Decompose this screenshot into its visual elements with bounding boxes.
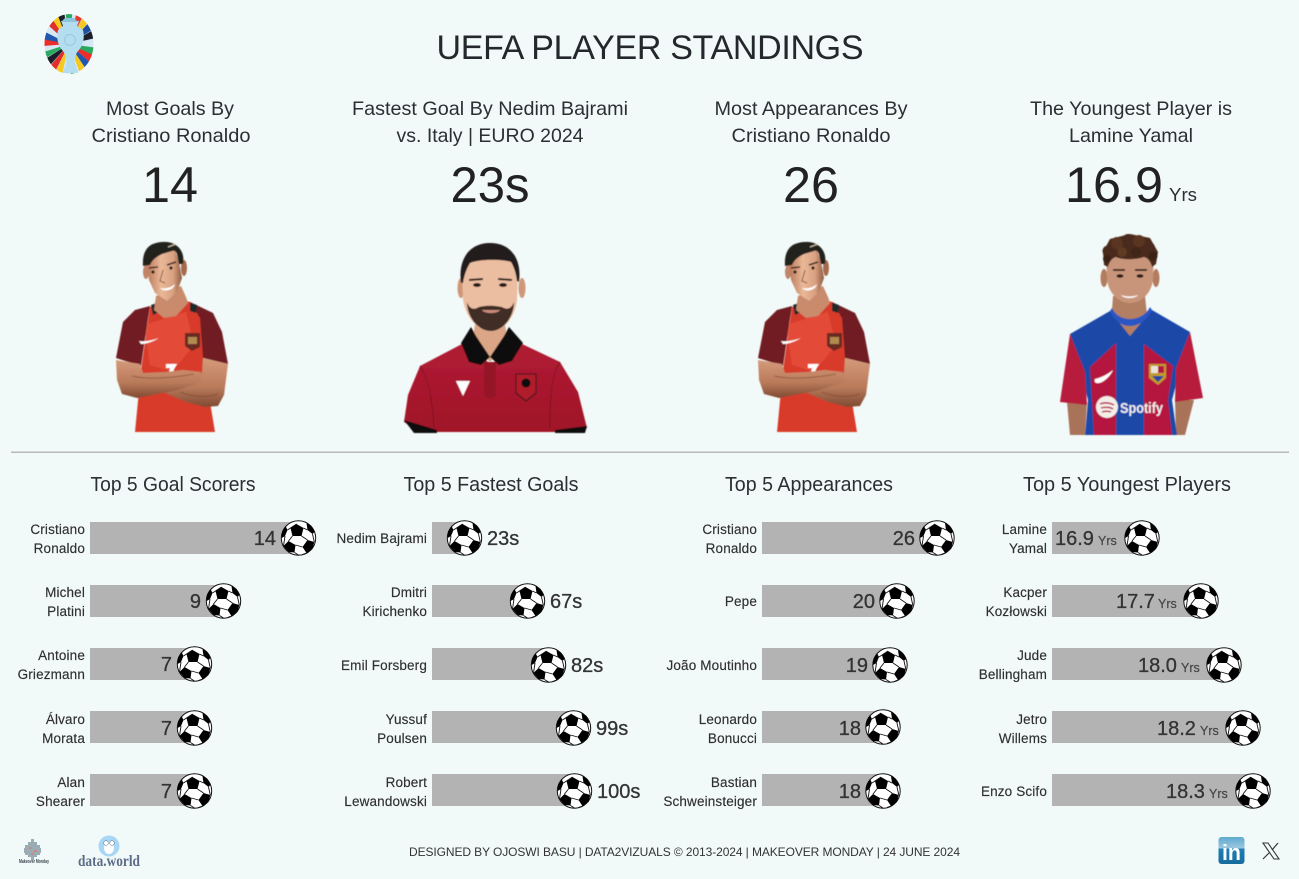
row: Enzo Scifo 18.3 Yrs: Enzo Scifo	[981, 784, 1047, 799]
row: João Moutinho 19	[666, 648, 907, 682]
row: Pepe 20: 20	[853, 591, 875, 613]
row: Dmitri Kirichenko 67s: 67s	[550, 591, 582, 613]
row: Jude Bellingham 18.0 Yrs: Yrs	[1181, 661, 1200, 675]
row: Lamine Yamal 16.9 Yrs: Lamine	[1002, 522, 1047, 537]
heading: Top 5 Goal Scorers: Top 5 Goal Scorers	[90, 474, 256, 496]
row: Michel Platini 9: Platini	[47, 604, 85, 619]
row: Cristiano Ronaldo 26: 26	[893, 528, 915, 550]
row: Robert Lewandowski 100s	[344, 774, 640, 809]
row: Jetro Willems 18.2 Yrs: 18.2	[1157, 718, 1196, 740]
row: Jetro Willems 18.2 Yrs	[999, 711, 1260, 746]
row: Alan Shearer 7: Alan	[57, 775, 85, 790]
row: Bastian Schweinsteiger 18: Schweinsteiger	[663, 794, 757, 809]
stat card: youngest player: Yrs	[1169, 185, 1197, 205]
row: Kacper Kozłowski 17.7 Yrs: Yrs	[1158, 597, 1177, 611]
row: Kacper Kozłowski 17.7 Yrs: 17.7	[1116, 591, 1155, 613]
row: Jude Bellingham 18.0 Yrs: Bellingham	[979, 667, 1047, 682]
row: Kacper Kozłowski 17.7 Yrs: Kozłowski	[986, 604, 1047, 619]
row: Alan Shearer 7	[36, 774, 212, 809]
divider	[11, 452, 1289, 453]
row: Dmitri Kirichenko 67s: Kirichenko	[362, 604, 427, 619]
row: Yussuf Poulsen 99s: Yussuf	[386, 712, 427, 727]
stat card: fastest goal: 23s	[450, 157, 530, 213]
stat card: youngest player: 16.9	[1065, 157, 1163, 213]
row: Cristiano Ronaldo 26: Ronaldo	[706, 541, 757, 556]
stat card: most goals: Cristiano Ronaldo	[92, 125, 251, 147]
row: Yussuf Poulsen 99s: 99s	[596, 718, 628, 740]
row: Lamine Yamal 16.9 Yrs: 16.9	[1055, 528, 1094, 550]
player photo: Cristiano Ronaldo, appearances	[758, 242, 870, 432]
row: Álvaro Morata 7: Álvaro	[46, 712, 85, 727]
row: Jude Bellingham 18.0 Yrs	[979, 648, 1241, 682]
stat card: most appearances: Cristiano Ronaldo	[732, 125, 891, 147]
row: Emil Forsberg 82s: 82s	[571, 655, 603, 677]
row: Yussuf Poulsen 99s: Poulsen	[377, 731, 427, 746]
row: Leonardo Bonucci 18: 18	[839, 718, 861, 740]
row: Nedim Bajrami 23s	[337, 521, 519, 555]
icon: X	[1263, 843, 1279, 859]
heading: Top 5 Appearances: Top 5 Appearances	[725, 474, 893, 496]
row: Leonardo Bonucci 18	[699, 710, 900, 746]
stat card: fastest goal: vs. Italy | EURO 2024	[396, 125, 584, 147]
stat card: most goals: 14	[142, 157, 198, 213]
row: Antoine Griezmann 7: 7	[161, 654, 172, 676]
row: Cristiano Ronaldo 26: Cristiano	[702, 522, 757, 537]
heading: Top 5 Youngest Players: Top 5 Youngest Players	[1023, 474, 1231, 496]
row: Emil Forsberg 82s	[341, 648, 603, 682]
logo: data.world: data.world	[78, 853, 140, 870]
bar chart: top 5 goal scorers	[18, 521, 316, 809]
row: Bastian Schweinsteiger 18	[663, 774, 900, 809]
row: Álvaro Morata 7: 7	[161, 718, 172, 740]
row: Yussuf Poulsen 99s	[377, 711, 628, 746]
row: Cristiano Ronaldo 14: Ronaldo	[34, 541, 85, 556]
heading: Top 5 Fastest Goals: Top 5 Fastest Goals	[404, 474, 578, 496]
stat card: most appearances: Most Appearances By	[714, 98, 908, 120]
title: UEFA PLAYER STANDINGS	[436, 29, 864, 67]
stat card: fastest goal	[352, 98, 628, 213]
stat card: most appearances	[714, 98, 908, 213]
row: Dmitri Kirichenko 67s	[362, 584, 582, 619]
row: Nedim Bajrami 23s: Nedim Bajrami	[337, 531, 427, 546]
player photo: Lamine Yamal: Spotify	[1120, 400, 1164, 417]
player photo: Lamine Yamal	[1060, 234, 1203, 435]
logo: UEFA Euro 2024 trophy	[44, 14, 94, 74]
row: Antoine Griezmann 7: Antoine	[38, 648, 85, 663]
row: Dmitri Kirichenko 67s: Dmitri	[391, 585, 427, 600]
logo: data.world	[78, 836, 140, 870]
row: Pepe 20: Pepe	[725, 594, 757, 609]
stat card: most goals	[92, 98, 251, 213]
stat card: most goals: Most Goals By	[106, 98, 234, 120]
row: Robert Lewandowski 100s: Lewandowski	[344, 794, 427, 809]
logo: Makeover Monday	[19, 839, 49, 865]
row: Cristiano Ronaldo 26	[702, 521, 954, 556]
row: Nedim Bajrami 23s: 23s	[487, 528, 519, 550]
bar chart: top 5 fastest goals	[337, 521, 640, 809]
icon: LinkedIn: in	[1222, 840, 1241, 865]
bar chart: top 5 appearances	[663, 521, 954, 809]
logo: Makeover Monday: Makeover Monday	[19, 859, 49, 865]
row: Pepe 20	[725, 584, 914, 618]
stat card: youngest player: Lamine Yamal	[1069, 125, 1193, 147]
row: Cristiano Ronaldo 14	[30, 521, 316, 556]
row: Álvaro Morata 7	[42, 711, 212, 746]
row: Robert Lewandowski 100s: 100s	[597, 781, 640, 803]
stat card: fastest goal: Fastest Goal By Nedim Bajrami	[352, 98, 628, 120]
row: Jude Bellingham 18.0 Yrs: Jude	[1017, 648, 1047, 663]
row: Bastian Schweinsteiger 18: Bastian	[711, 775, 757, 790]
row: Lamine Yamal 16.9 Yrs: Yrs	[1098, 534, 1117, 548]
stat card: most appearances: 26	[783, 157, 839, 213]
row: Alan Shearer 7: 7	[161, 781, 172, 803]
row: Jude Bellingham 18.0 Yrs: 18.0	[1138, 655, 1177, 677]
row: João Moutinho 19: 19	[846, 655, 868, 677]
player photo: Nedim Bajrami	[404, 243, 587, 433]
icon: LinkedIn	[1218, 837, 1244, 865]
row: Enzo Scifo 18.3 Yrs	[981, 774, 1270, 808]
row: Cristiano Ronaldo 14: Cristiano	[30, 522, 85, 537]
row: João Moutinho 19: João Moutinho	[666, 658, 757, 673]
row: Enzo Scifo 18.3 Yrs: Yrs	[1209, 787, 1228, 801]
footer credit: DESIGNED BY OJOSWI BASU | DATA2VIZUALS © 2013-2024 | MAKEOVER MONDAY | 24 JUNE 2024	[409, 845, 960, 859]
bar chart: top 5 youngest players	[979, 521, 1270, 808]
row: Kacper Kozłowski 17.7 Yrs	[986, 584, 1218, 619]
row: Leonardo Bonucci 18: Leonardo	[699, 712, 757, 727]
row: Emil Forsberg 82s: Emil Forsberg	[341, 658, 427, 673]
stat card: youngest player: The Youngest Player is	[1030, 98, 1232, 120]
row: Michel Platini 9	[45, 584, 241, 619]
row: Lamine Yamal 16.9 Yrs	[1002, 521, 1159, 556]
player photo: Cristiano Ronaldo, goals	[116, 242, 228, 432]
row: Alan Shearer 7: Shearer	[36, 794, 85, 809]
row: Michel Platini 9: 9	[190, 591, 201, 613]
row: Kacper Kozłowski 17.7 Yrs: Kacper	[1003, 585, 1047, 600]
row: Jetro Willems 18.2 Yrs: Jetro	[1016, 712, 1047, 727]
row: Lamine Yamal 16.9 Yrs: Yamal	[1009, 541, 1047, 556]
row: Álvaro Morata 7: Morata	[42, 731, 85, 746]
row: Enzo Scifo 18.3 Yrs: 18.3	[1166, 781, 1205, 803]
row: Robert Lewandowski 100s: Robert	[386, 775, 427, 790]
row: Leonardo Bonucci 18: Bonucci	[708, 731, 757, 746]
row: Michel Platini 9: Michel	[45, 585, 85, 600]
row: Jetro Willems 18.2 Yrs: Willems	[999, 731, 1047, 746]
row: Antoine Griezmann 7	[18, 647, 212, 682]
row: Jetro Willems 18.2 Yrs: Yrs	[1200, 724, 1219, 738]
stat card: youngest player	[1030, 98, 1232, 213]
row: Cristiano Ronaldo 14: 14	[254, 528, 276, 550]
row: Antoine Griezmann 7: Griezmann	[18, 667, 85, 682]
row: Bastian Schweinsteiger 18: 18	[839, 781, 861, 803]
